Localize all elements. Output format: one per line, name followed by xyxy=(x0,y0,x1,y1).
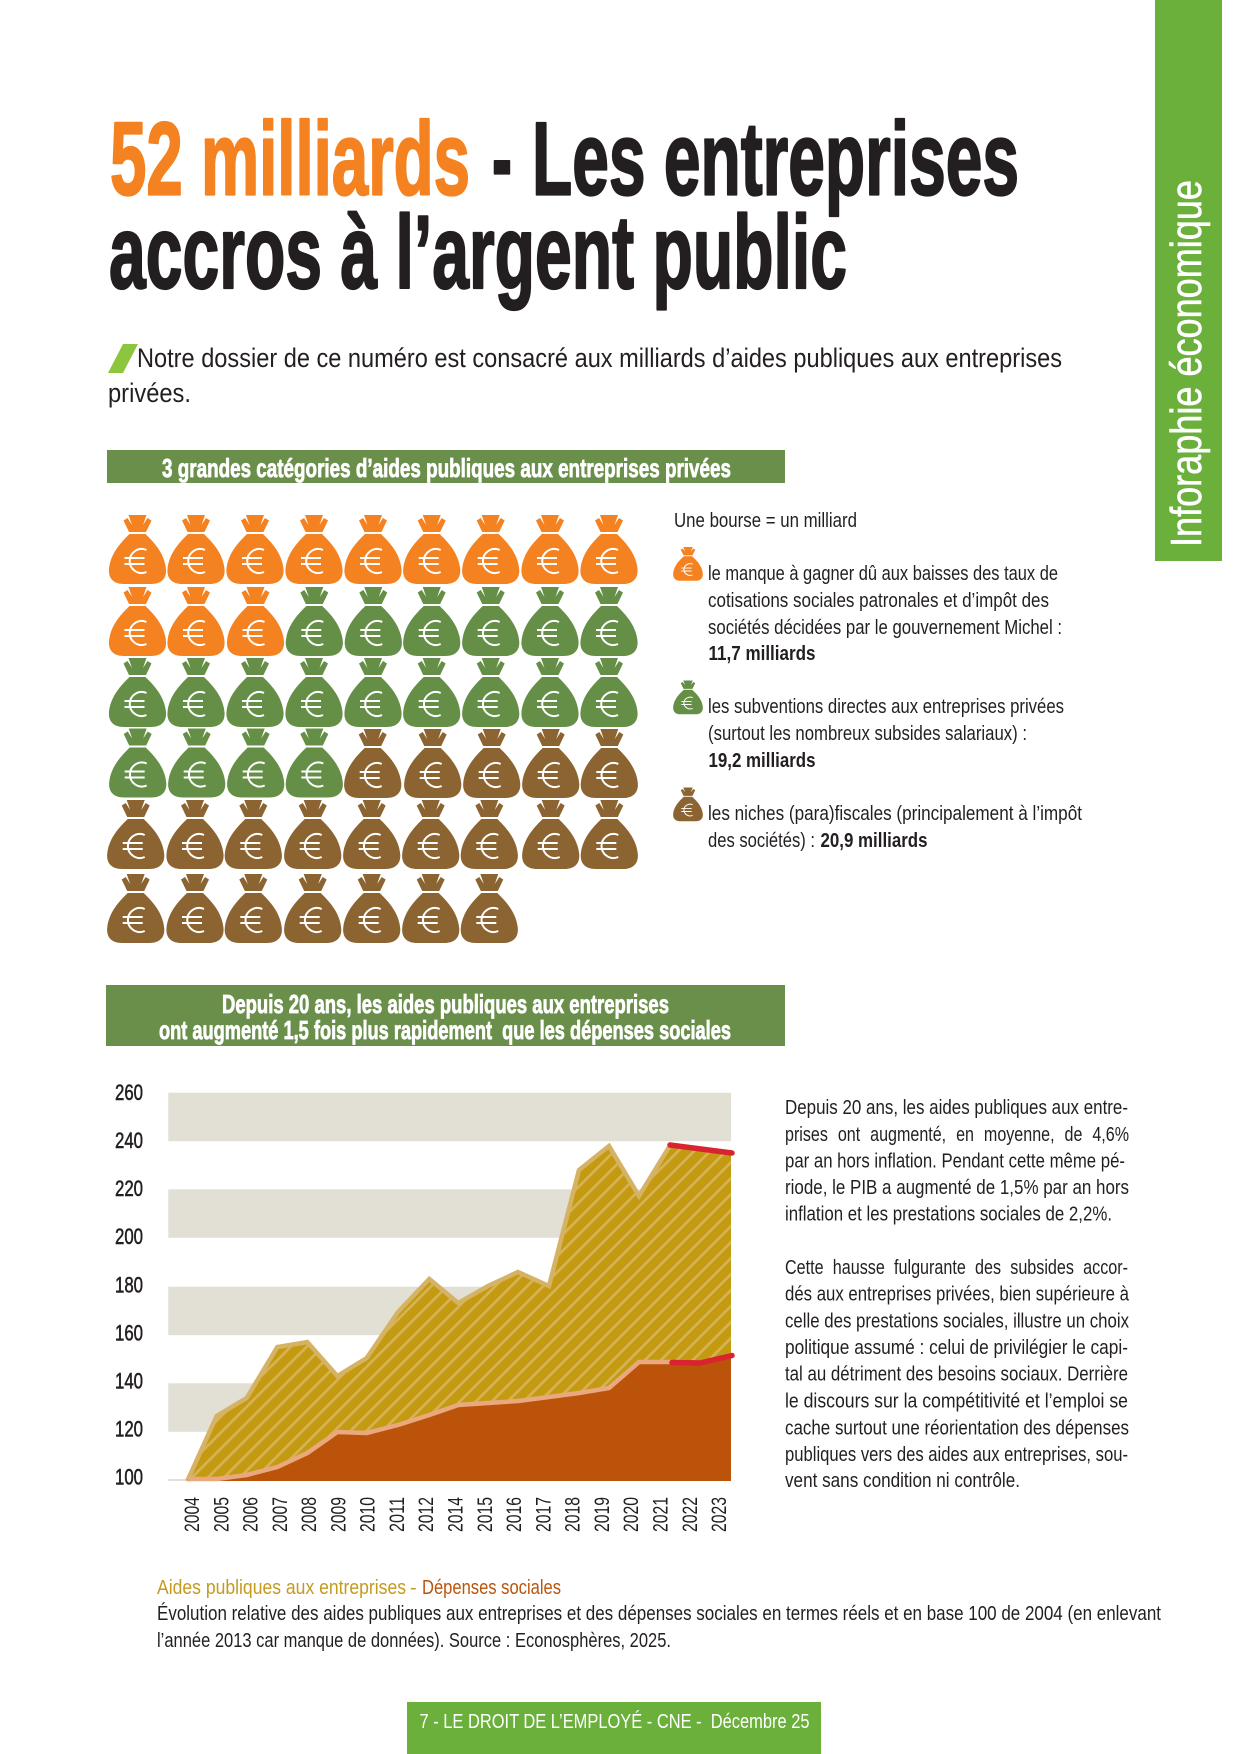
paragraph 2: dés aux entreprises privées, bien supérieure à xyxy=(785,1282,1129,1306)
legend: categories of aid xyxy=(673,509,1082,852)
intro text: Notre dossier de ce numéro est consacré aux milliards d’aides publiques aux entreprises xyxy=(137,343,1062,373)
x axis labels: 2020 xyxy=(620,1497,643,1532)
heading banner: chart: Depuis 20 ans, les aides publiques aux entreprises xyxy=(222,989,669,1019)
title: - xyxy=(492,102,512,218)
x axis labels: 2009 xyxy=(327,1497,350,1532)
x axis labels xyxy=(181,1497,731,1532)
heading banner: chart: ont augmenté 1,5 fois plus rapidement que les dépenses sociales xyxy=(159,1015,731,1045)
x axis labels: 2022 xyxy=(679,1497,702,1532)
y axis labels: 240 xyxy=(115,1128,143,1153)
x axis labels: 2018 xyxy=(562,1497,585,1532)
paragraph 2: le discours sur la compétitivité et l’emploi se xyxy=(785,1390,1128,1412)
commentary text xyxy=(785,1096,1130,1492)
legend item: orange: 11,7 milliards xyxy=(708,642,816,665)
paragraph 2: Cette hausse fulgurante des subsides accor- xyxy=(785,1256,1128,1279)
heading banner: categories: 3 grandes catégories d’aides publiques aux entreprises privées xyxy=(162,453,731,483)
area: public aid xyxy=(187,1146,731,1481)
legend item: orange: cotisations sociales patronales et d’impôt des xyxy=(708,589,1049,612)
series legend: - xyxy=(410,1577,417,1599)
paragraph 1: prises ont augmenté, en moyenne, de 4,6% xyxy=(785,1123,1129,1146)
intro text: privées. xyxy=(108,378,191,408)
paragraph 1: inflation et les prestations sociales de 2,2%. xyxy=(785,1202,1112,1226)
row 2 xyxy=(109,587,638,656)
y axis labels: 180 xyxy=(115,1272,143,1298)
paragraph 1 xyxy=(785,1096,1129,1226)
paragraph 2: vent sans condition ni contrôle. xyxy=(785,1469,1020,1492)
sidebar: section label: Inforaphie économique xyxy=(1162,180,1211,547)
legend item: orange xyxy=(673,547,1062,665)
intro text xyxy=(108,343,1062,408)
legend item: green: (surtout les nombreux subsides salariaux) : xyxy=(708,722,1027,745)
row 4 xyxy=(109,728,638,798)
heading banner: categories xyxy=(107,450,785,483)
area chart xyxy=(115,1080,732,1532)
x axis labels: 2021 xyxy=(650,1497,672,1532)
x axis labels: 2016 xyxy=(503,1497,526,1532)
title xyxy=(109,102,1019,311)
paragraph 1: par an hors inflation. Pendant cette même pé- xyxy=(785,1150,1125,1172)
y axis labels: 120 xyxy=(115,1416,143,1442)
sidebar: section label xyxy=(1155,0,1222,561)
row 5 xyxy=(107,800,638,869)
pictogram: 52 money bags xyxy=(107,515,638,943)
y axis labels: 200 xyxy=(115,1224,143,1249)
y axis labels: 220 xyxy=(115,1176,143,1201)
x axis labels: 2004 xyxy=(181,1497,204,1532)
heading banner: chart xyxy=(106,985,785,1046)
paragraph 2 xyxy=(785,1256,1130,1492)
background bands xyxy=(168,1093,731,1481)
x axis labels: 2019 xyxy=(591,1497,614,1532)
paragraph 2: publiques vers des aides aux entreprises, sou- xyxy=(785,1443,1128,1466)
x axis labels: 2014 xyxy=(444,1497,468,1532)
footer: 7 - LE DROIT DE L’EMPLOYÉ - CNE - Décembre 25 xyxy=(420,1710,810,1733)
x axis labels: 2012 xyxy=(415,1497,438,1532)
footer xyxy=(407,1702,821,1754)
x axis labels: 2010 xyxy=(357,1497,380,1532)
y axis labels xyxy=(115,1080,143,1490)
x axis labels: 2023 xyxy=(708,1497,731,1532)
row 3 xyxy=(109,658,638,727)
legend item: orange: sociétés décidées par le gouvernement Michel : xyxy=(708,616,1062,639)
series legend: Aides publiques aux entreprises xyxy=(157,1577,406,1599)
x axis labels: 2007 xyxy=(269,1497,292,1532)
chart caption xyxy=(157,1577,1161,1652)
x axis labels: 2015 xyxy=(474,1497,497,1532)
red highlight: lower xyxy=(672,1356,732,1363)
title: accros à l’argent public xyxy=(109,195,847,311)
legend item: brown: 20,9 milliards xyxy=(820,829,928,852)
y axis labels: 260 xyxy=(115,1080,143,1105)
x axis labels: 2008 xyxy=(298,1497,321,1532)
row 1 xyxy=(109,515,638,584)
legend item: orange: le manque à gagner dû aux baisses des taux de xyxy=(708,562,1058,585)
y axis labels: 140 xyxy=(115,1368,143,1394)
legend item: brown: les niches (para)fiscales (principalement à l’impôt xyxy=(708,802,1082,825)
paragraph 2: cache surtout une réorientation des dépenses xyxy=(785,1416,1129,1440)
area: social spending xyxy=(187,1356,731,1481)
paragraph 1: Depuis 20 ans, les aides publiques aux entre- xyxy=(785,1096,1128,1119)
paragraph 2: tal au détriment des besoins sociaux. Derrière xyxy=(785,1362,1128,1386)
y axis labels: 160 xyxy=(115,1320,143,1346)
legend item: brown xyxy=(673,787,1082,852)
paragraph 2: politique assumé : celui de privilégier le capi- xyxy=(785,1336,1128,1359)
x axis labels: 2006 xyxy=(240,1497,263,1532)
legend item: green: 19,2 milliards xyxy=(708,749,816,772)
legend item: brown: des sociétés) : xyxy=(708,829,815,852)
legend title: Une bourse = un milliard xyxy=(674,509,857,532)
paragraph 1: riode, le PIB a augmenté de 1,5% par an hors xyxy=(785,1176,1129,1199)
paragraph 2: celle des prestations sociales, illustre un choix xyxy=(785,1310,1130,1332)
chart caption: l’année 2013 car manque de données). Source : Econosphères, 2025. xyxy=(157,1629,671,1652)
x axis labels: 2017 xyxy=(532,1497,555,1532)
series legend: Dépenses sociales xyxy=(422,1577,561,1599)
x axis labels: 2011 xyxy=(386,1497,409,1532)
row 6 xyxy=(107,874,518,943)
title: 52 milliards xyxy=(110,102,470,218)
x axis labels: 2005 xyxy=(210,1497,233,1532)
legend item: green: les subventions directes aux entreprises privées xyxy=(708,695,1064,718)
legend item: green xyxy=(673,680,1064,772)
red highlight: upper xyxy=(670,1145,732,1153)
y axis labels: 100 xyxy=(115,1464,143,1490)
